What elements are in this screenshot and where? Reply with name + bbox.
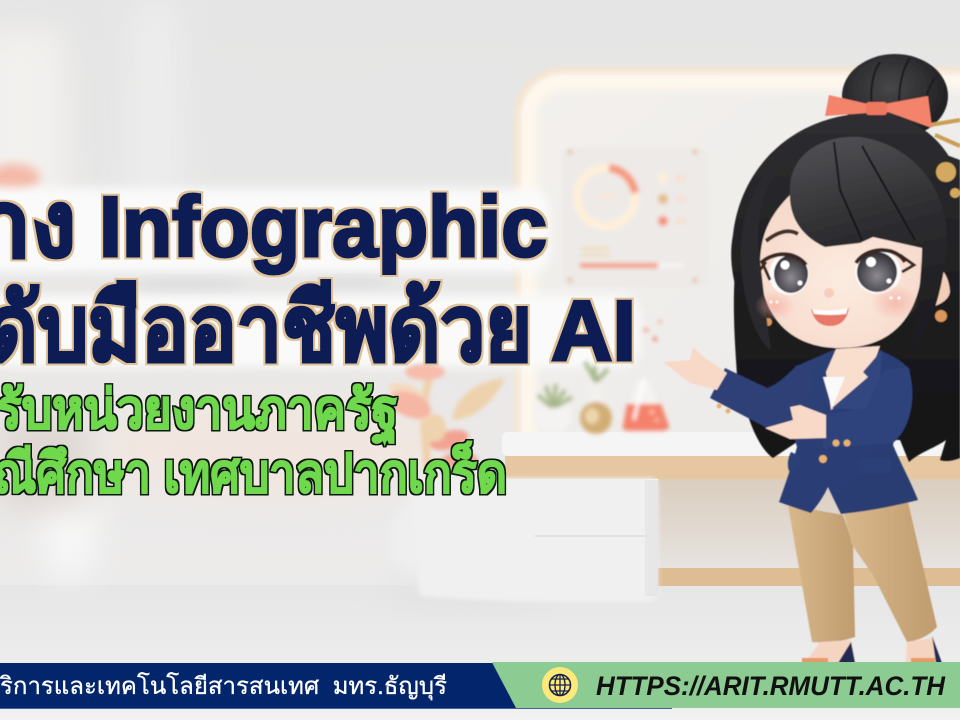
head hair [731, 113, 960, 345]
fringe [790, 137, 947, 350]
gold hair pins [930, 120, 960, 146]
shelf props: plants and flask [534, 320, 669, 434]
hair bun [842, 54, 948, 138]
feet and shoes [802, 636, 942, 663]
character: chibi woman in navy blazer [663, 54, 960, 663]
eyebrow [766, 231, 798, 241]
dashboard card [564, 150, 706, 285]
coral bow [825, 95, 932, 128]
footer green url band [492, 662, 960, 708]
hands [663, 347, 826, 439]
icon: globe [542, 667, 578, 703]
foreground sleeve [823, 367, 912, 448]
url: HTTPS://ARIT.RMUTT.AC.TH [596, 671, 945, 701]
gold hair ornaments [936, 162, 956, 182]
main title: Infographic [99, 180, 547, 275]
subtitle [0, 380, 507, 504]
white glow behind title [0, 188, 640, 367]
soft grey smudges between title lines [135, 277, 390, 290]
long hair behind body [734, 130, 960, 462]
ear and earrings [920, 262, 950, 310]
main title [0, 174, 636, 380]
main title: AI [551, 284, 636, 379]
blush and nose [755, 284, 919, 321]
face [760, 195, 923, 348]
blurred plant behind subtitle [385, 364, 505, 470]
back-lit wall panel with dashboard [518, 71, 960, 481]
eyes [760, 250, 914, 295]
shelf with cabinet and wood trim [410, 432, 960, 602]
footer navy bar [0, 663, 672, 709]
trousers [788, 502, 937, 642]
blazer [710, 346, 918, 514]
raised sleeve [710, 365, 815, 428]
mouth [811, 308, 849, 326]
